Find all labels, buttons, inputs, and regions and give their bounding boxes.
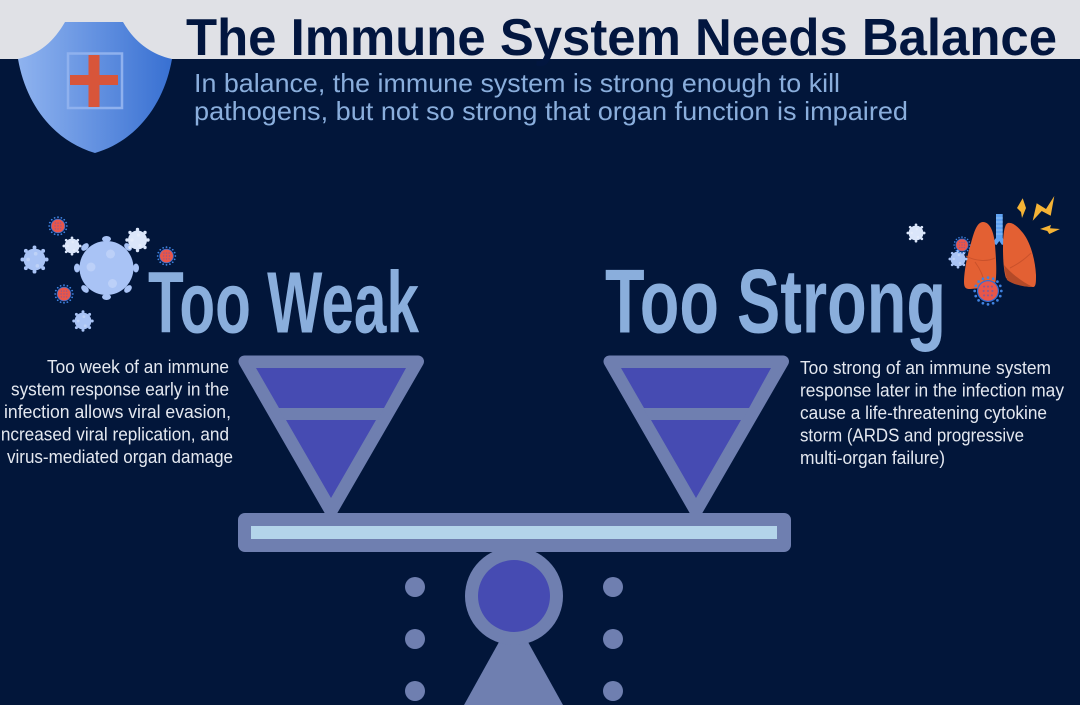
text block: too weak description: virus-mediated organ damage	[7, 447, 233, 467]
text block: too strong description: cause a life-threatening cytokine	[800, 403, 1047, 423]
base pedestal	[464, 642, 563, 705]
text block: too weak description: Too week of an immune	[47, 357, 229, 377]
text block: too strong description	[800, 358, 1064, 468]
text block: too weak description: increased viral replication, and	[0, 424, 229, 444]
left pan	[244, 362, 418, 512]
subtitle	[194, 68, 908, 126]
title: The Immune System Needs Balance	[186, 9, 1057, 67]
subtitle: pathogens, but not so strong that organ function is impaired	[194, 96, 908, 126]
heading: too strong: Too Strong	[605, 252, 946, 352]
text block: too weak description: system response early in the	[11, 380, 229, 400]
icon: lungs with viruses and lightning	[906, 196, 1060, 306]
header band	[0, 0, 1080, 59]
text block: too strong description: Too strong of an immune system	[800, 358, 1051, 378]
text block: too strong description: multi-organ failure)	[800, 448, 945, 468]
right pan	[610, 362, 783, 512]
subtitle: In balance, the immune system is strong enough to kill	[194, 68, 840, 98]
text block: too weak description	[0, 357, 233, 467]
pivot	[465, 547, 563, 645]
dots	[405, 577, 623, 701]
beam	[238, 513, 791, 552]
balance scale	[238, 362, 791, 705]
text block: too strong description: response later in the infection may	[800, 380, 1064, 400]
text block: too weak description: infection allows viral evasion,	[4, 402, 231, 422]
heading: too weak: Too Weak	[148, 254, 419, 352]
icon: virus cluster	[20, 216, 176, 332]
large virus	[74, 236, 139, 300]
icon: shield with medical cross	[18, 22, 172, 153]
text block: too strong description: storm (ARDS and progressive	[800, 426, 1024, 446]
